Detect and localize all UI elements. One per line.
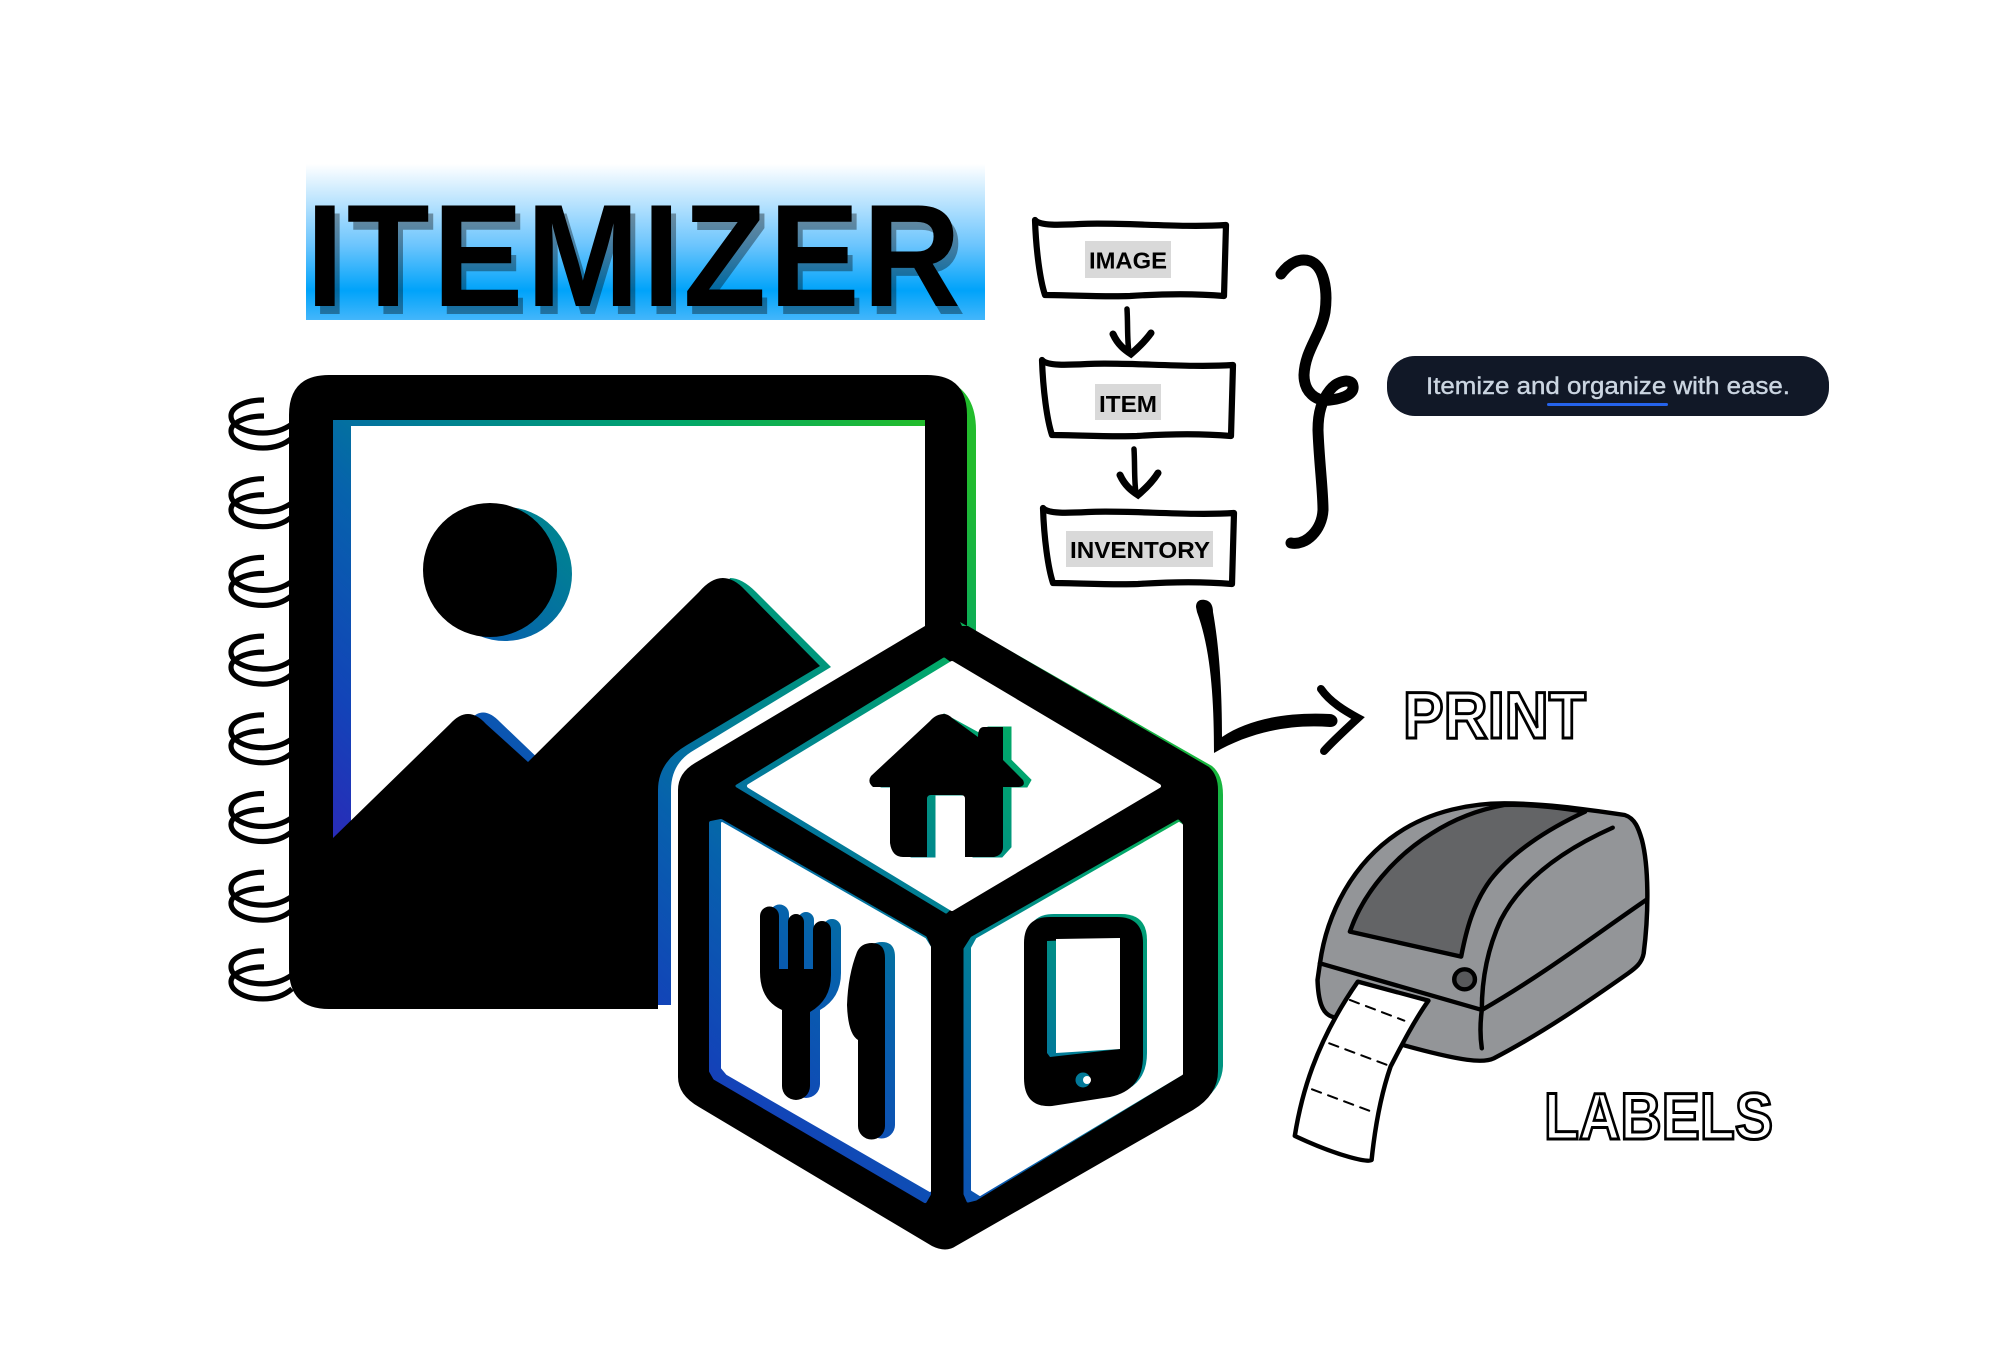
flow box: IMAGE: IMAGE xyxy=(1089,248,1167,274)
icon: knife xyxy=(847,942,895,1140)
arrow: item to inventory xyxy=(1120,449,1158,495)
left face xyxy=(711,821,930,1201)
flow box: INVENTORY: INVENTORY xyxy=(1070,537,1210,563)
tagline pill xyxy=(1387,356,1829,416)
tagline pill: Itemize and organize with ease. xyxy=(1426,373,1790,400)
icon: cube with household item symbols xyxy=(678,622,1223,1250)
curly brace xyxy=(1281,260,1353,543)
flow box: ITEM: ITEM xyxy=(1099,391,1157,417)
icon: house xyxy=(869,714,1031,857)
icon: spiral notebook binding coils xyxy=(231,400,292,999)
icon: fork xyxy=(760,904,841,1100)
text: LABELS: LABELS xyxy=(1544,1079,1773,1153)
flow box: ITEM xyxy=(1042,360,1233,436)
arrow: inventory to print xyxy=(1196,600,1358,753)
title: ITEMIZER: ITEMIZER xyxy=(306,173,961,337)
text: PRINT: PRINT xyxy=(1403,678,1586,752)
icon: tablet xyxy=(1024,914,1147,1106)
cube body xyxy=(678,622,1223,1250)
arrow: image to item xyxy=(1113,309,1151,354)
icon: notebook with image picture xyxy=(289,375,976,1009)
printed label strip xyxy=(1295,982,1428,1161)
icon: label printer xyxy=(1295,803,1647,1161)
flow box: INVENTORY xyxy=(1043,508,1234,584)
flow box: IMAGE xyxy=(1035,220,1226,296)
title: ITEMIZER: ITEMIZER xyxy=(311,181,966,345)
right face xyxy=(965,821,1182,1201)
top face xyxy=(737,659,1159,912)
